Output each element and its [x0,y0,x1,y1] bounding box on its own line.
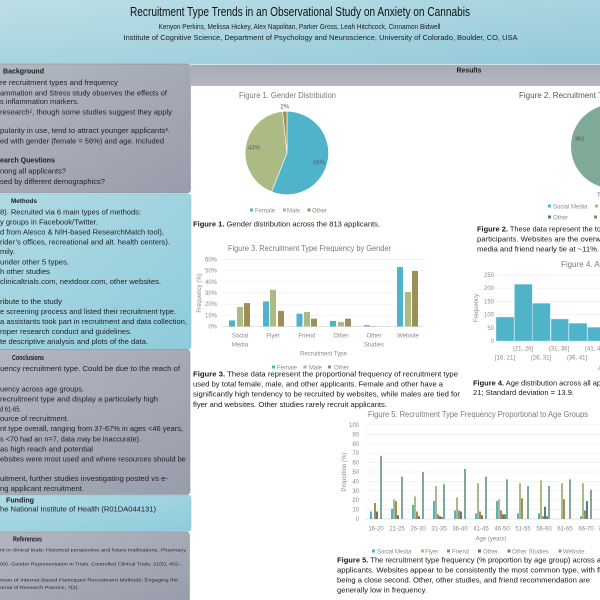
x axis labels: 31-35 [431,526,447,532]
bars: flyer [393,480,584,519]
chart title: Figure 5. Recruitment Type Frequency Proportional to Age Groups [368,410,588,419]
y axis [342,423,360,523]
heading: background: Background [3,66,44,76]
bars: male [237,290,411,326]
text: conclusions body: uitment, further studies investigating posted vs e- [0,474,169,483]
caption: figure 3: Figure 3. These data represent the proportional frequency of recruitment type [193,370,458,378]
text: funding body: he National Institute of Health (R01DA044131) [0,504,156,514]
panel: methods [0,194,191,350]
y axis: 10 [352,508,360,514]
chart title: Figure 3. Recruitment Type Frequency by Gender [228,244,391,253]
authors: Kenyon Perkins, Melissa Hickey, Alex Napolitan, Parker Gross, Leah Hitchcock, Cinnamon Bidwell [158,22,441,31]
legend: Female [255,208,276,214]
caption: figure 3: significantly high tendency to be recruited by websites, while males are tied for [193,390,461,398]
y axis: 70 [352,451,360,457]
pie labels: 56% [313,160,326,166]
text: references body: 00). Gender Representation in Trials. Controlled Clinical Trials, 21(5), 462– [0,562,181,568]
panel: results header: Results [456,68,482,74]
histogram bars [496,284,600,341]
text: background body: re recruitment types and frequency [0,78,118,87]
text: methods body: rider’s offices, recreational and alt. health centers). [0,238,170,246]
caption: figure 4: 21; Standard deviation = 13.9. [473,388,574,397]
text: methods body: e screening process and listed their recruitment type. [0,307,176,316]
y axis: 20 [352,498,360,504]
text: methods body: a assistants took part in recruitment and data collection, [0,317,187,326]
x axis labels: 41-45 [473,526,489,532]
y axis: 50 [487,326,495,332]
panel: conclusions [0,350,190,494]
x axis labels: (41, 4 [585,346,600,352]
x axis labels: Media [232,342,249,348]
legend: Female [277,365,298,371]
legend: Website [563,549,585,555]
text: methods body: 8). Recruited via 6 main types of methods: [0,208,141,216]
x axis labels: Studies [364,342,384,348]
x axis labels [368,526,600,542]
legend: Flyer [425,549,438,555]
y axis: 50% [205,269,218,275]
pie slices [245,111,329,195]
heading: methods: Methods [11,199,38,205]
caption: figure 3: used by total female, male, and other applicants. Female and other have a [193,380,443,388]
legend [272,365,349,371]
x axis labels: Age (years) [475,536,507,542]
y axis: 100 [349,423,360,429]
legend: Other [553,215,568,221]
y axis: 0 [356,517,360,523]
text: references body: nt in clinical trials: Historical perspective and future implications. Pharmacy [0,548,187,554]
text: background body [0,78,172,146]
chart: figure 4 age histogram [474,260,600,372]
legend: Male [287,208,301,214]
caption: figure 5 [337,556,600,594]
x axis labels: 51-55 [515,526,531,532]
text: research questions: nong all applicants? [0,166,66,176]
y axis: 60 [352,461,360,467]
caption: figure 5: applicants. Websites appear to be consistently the most common type, with fl [337,566,600,574]
text: conclusions body: uency across age groups. [0,384,84,394]
bars: social media [370,501,582,519]
legend: Friend [452,549,469,555]
caption: figure 5: generally low in frequency. [337,586,427,594]
caption: figure 5: Figure 5. The recruitment type frequency (% proportion by age group) across a [337,556,600,564]
text: background body: ammation and Stress study observes the effects of [0,88,167,98]
text: background body: research¹, though some studies suggest they apply [0,108,172,116]
legend: Other Studies [512,549,549,555]
text: methods body: roper research conduct and guidelines. [0,327,132,336]
y axis: 0% [208,324,218,330]
x axis labels: 26-30 [410,526,426,532]
text: conclusions body [0,364,186,493]
y axis: 30% [205,291,218,297]
y axis: 150 [484,299,495,305]
title: Recruitment Type Trends in an Observational Study on Anxiety on Cannabis [130,5,470,19]
caption: figure 2: media and friend nearly tie at ~11%. [477,244,599,254]
text: background body: pularity in use, tend to attract younger applicants³. [0,126,170,135]
y axis: 40 [352,479,360,485]
y axis [474,273,495,345]
x axis labels: 46-50 [494,526,510,532]
text: conclusions body: uency recruitment type. Could be due to the reach of [0,364,180,373]
text: conclusions body: d 61-65. [0,404,21,414]
y axis: 0 [491,339,495,345]
x axis labels: [16, 21] [495,356,515,362]
heading: references: References [13,534,42,544]
panel: results header [191,65,600,86]
text: methods body: ribute to the study [0,297,62,306]
x axis labels [232,334,419,358]
text: conclusions body: recruitment type and display a particularly high [0,394,158,404]
y axis: 50 [352,470,360,476]
pie labels: 362 [575,136,584,142]
pie labels: 7 [597,192,600,198]
legend: Social Media [377,549,412,555]
chart title: Figure 1. Gender Distribution [239,91,336,100]
x axis labels: (36, 41] [567,356,588,362]
text: research questions [0,166,105,186]
pie labels [248,104,326,166]
bars: other [244,271,418,326]
x axis labels: 66-70 [578,526,594,532]
caption: figure 5: being a close second. Other, other studies, and friend recommendation are [337,576,590,584]
legend [548,204,598,221]
x axis labels: Flyer [266,334,280,340]
header banner [0,0,600,64]
legend [372,549,585,555]
legend [250,208,327,214]
pie labels [575,136,600,198]
x axis labels: Friend [298,334,316,340]
caption: figure 2 [477,224,600,254]
x axis labels: 61-65 [557,526,573,532]
chart: figure 2 recruitment type pie [519,91,600,221]
text: methods body [0,208,187,346]
heading: funding: Funding [6,496,34,504]
caption: figure 2: participants. Websites are the overw [477,234,600,244]
x axis labels: (26, 31] [531,356,552,362]
legend: Male [309,365,323,371]
caption: figure 3 [193,370,461,409]
text: conclusions body: nt type overall, ranging from 37-67% in ages <46 years, [0,424,183,433]
y axis: 200 [484,286,495,292]
y axis: 90 [352,432,360,438]
caption: figure 1: Figure 1. Gender distribution across the 813 applicants. [193,220,380,228]
y axis [197,258,218,330]
pie labels: 2% [280,104,290,110]
y axis: 10% [205,313,218,319]
y axis: Frequency [474,294,480,322]
y axis: Frequency (%) [197,273,203,313]
chart: figure 1 gender pie [239,91,336,214]
x axis labels: Other [333,334,349,340]
text: research questions: sed by different demographics? [0,177,105,186]
y axis: 250 [484,273,495,279]
legend: Social Media [553,204,588,210]
text: methods body: h other studies [0,267,50,276]
panel: background [0,64,190,193]
x axis labels: (31, 36] [549,346,570,352]
y axis: 40% [205,280,218,286]
legend: Other [483,549,498,555]
caption: figure 4 [473,378,600,397]
caption: figure 4: Figure 4. Age distribution across all ap [473,378,600,388]
text: methods body: clinicaltrials.com, nextdoor.com, other websites. [0,277,161,286]
text: methods body: under other 5 types. [0,258,69,266]
y axis: 100 [484,313,495,319]
caption: figure 3: flyer and websites. Other studies rarely recruit applicants. [193,400,387,409]
y axis: Proportion (%) [342,453,348,491]
text: methods body: d from Alesco & NIH-based ResearchMatch tool), [0,228,164,236]
x axis labels: (21, 26] [513,346,534,352]
x axis labels [495,346,600,372]
text: conclusions body: as high reach and potential [0,444,93,454]
text: methods body: mily. [0,247,15,256]
pie [571,104,600,188]
caption: figure 2: Figure 2. These data represent the to [477,224,600,234]
y axis: 20% [205,302,218,308]
x axis labels: 36-40 [452,526,468,532]
text: conclusions body: ebsites were most used and where resources should be [0,454,186,464]
x axis labels: Website [397,334,419,340]
x axis labels: Other [366,334,382,340]
x axis labels: Social [232,334,248,340]
pie labels: 43% [248,146,261,152]
y axis: 30 [352,489,360,495]
text: references body: urnal of Research Practice, 7(2). [0,585,79,591]
y axis: 80 [352,442,360,448]
x axis labels: 56-60 [536,526,552,532]
affiliation: Institute of Cognitive Science, Department of Psychology and Neuroscience, University of Colorado, Boulder, CO, USA [124,33,518,42]
bars: other [376,501,588,519]
chart: figure 3 recruitment type by gender [197,244,425,371]
legend: Other [334,365,349,371]
heading: research questions: earch Questions [0,156,55,164]
text: conclusions body: ng applicant recruitment. [0,484,84,493]
legend: Other [312,208,327,214]
panel: references [0,532,190,600]
text: methods body: y groups in Facebook/Twitter. [0,218,98,226]
bars: website [380,456,592,519]
text: conclusions body: ource of recruitment. [0,414,69,423]
text: references body: rison of Internet-Based Participant Recruitment Methods: Engaging the [0,578,178,584]
text: background body: s inflammation markers. [0,97,79,106]
text: conclusions body: s <70 had an n=7, data may be inaccurate). [0,434,141,444]
x axis labels: Recruitment Type [300,352,348,358]
bars: female [229,267,403,326]
x axis labels: 21-25 [389,526,405,532]
chart: figure 5 recruitment type by age group [342,410,600,555]
text: methods body: te descriptive analysis and plots of the data. [0,337,148,346]
bars: friend [374,498,586,519]
text: references body [0,548,187,591]
panel: funding [0,495,191,532]
x axis labels: 16-20 [368,526,384,532]
heading: conclusions: Conclusions [12,353,44,362]
bars: other studies [441,514,548,519]
y axis: 60% [205,258,218,264]
text: background body: ed with gender (female = 56%) and age. Included [0,136,164,146]
